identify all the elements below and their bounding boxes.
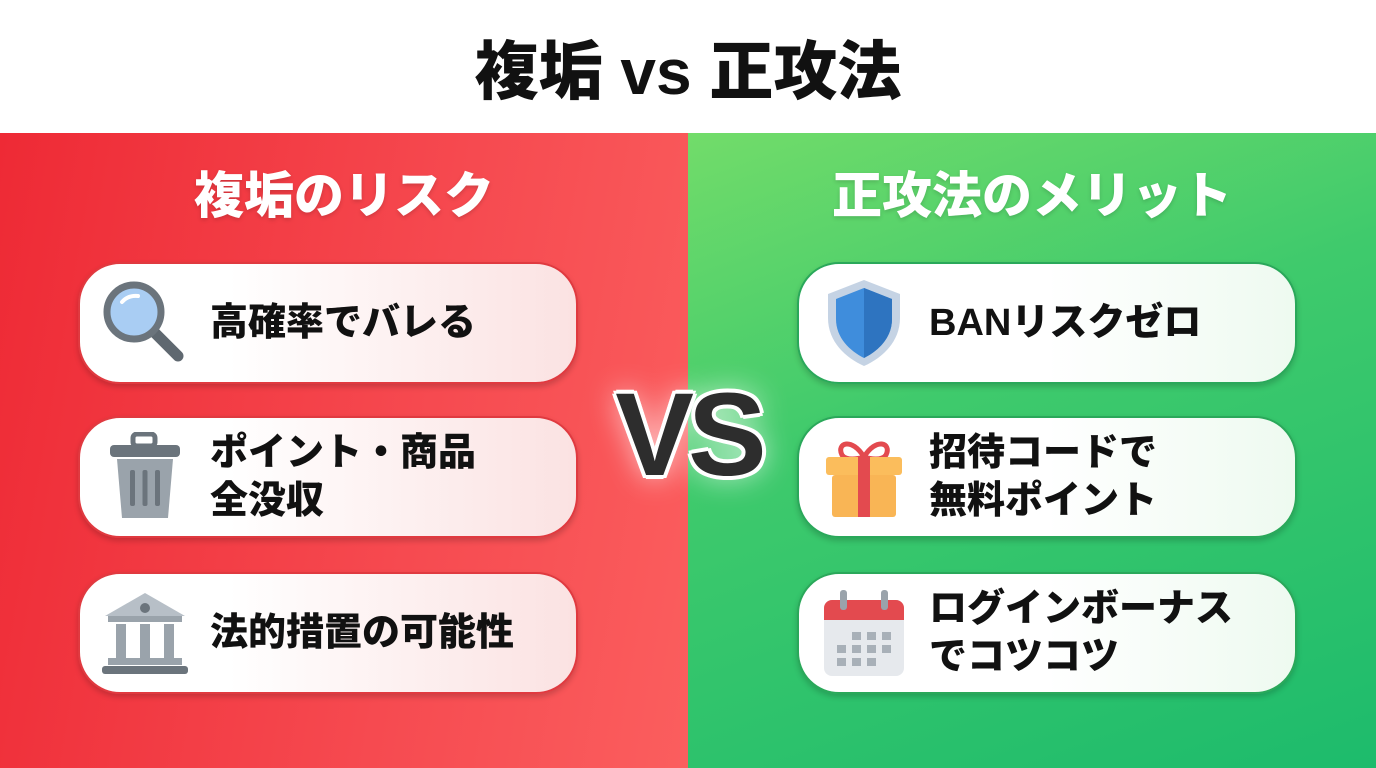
text (929, 587, 1233, 678)
card: legal (78, 572, 578, 694)
icon: gift (826, 442, 902, 517)
text (929, 432, 1157, 522)
card: no ban (797, 262, 1297, 384)
text: 招待コードで (929, 432, 1157, 474)
text: 全没収 (210, 480, 324, 522)
icon: trash (110, 432, 180, 518)
panel: merits (688, 133, 1376, 768)
icon: calendar (824, 590, 904, 676)
card: detection (78, 262, 578, 384)
card: confiscation (78, 416, 578, 538)
text: 無料ポイント (929, 480, 1157, 522)
icon: courthouse (102, 593, 188, 674)
text (210, 432, 476, 522)
panel: risks (0, 133, 688, 768)
text: でコツコツ (929, 636, 1119, 678)
text: ログインボーナス (929, 588, 1233, 630)
text: 法的措置の可能性 (210, 612, 514, 654)
heading: risks: 複垢のリスク (194, 168, 494, 224)
card: login bonus (797, 572, 1297, 694)
title: 複垢 vs 正攻法 (475, 36, 901, 108)
VS badge: VS (615, 369, 761, 501)
heading: merits: 正攻法のメリット (832, 168, 1232, 224)
text: 高確率でバレる (210, 302, 476, 344)
text: ポイント・商品 (210, 432, 476, 474)
icon: shield (828, 280, 900, 366)
icon: magnifier (104, 282, 184, 362)
card: invite code (797, 416, 1297, 538)
text: BANリスクゼロ (929, 302, 1201, 344)
